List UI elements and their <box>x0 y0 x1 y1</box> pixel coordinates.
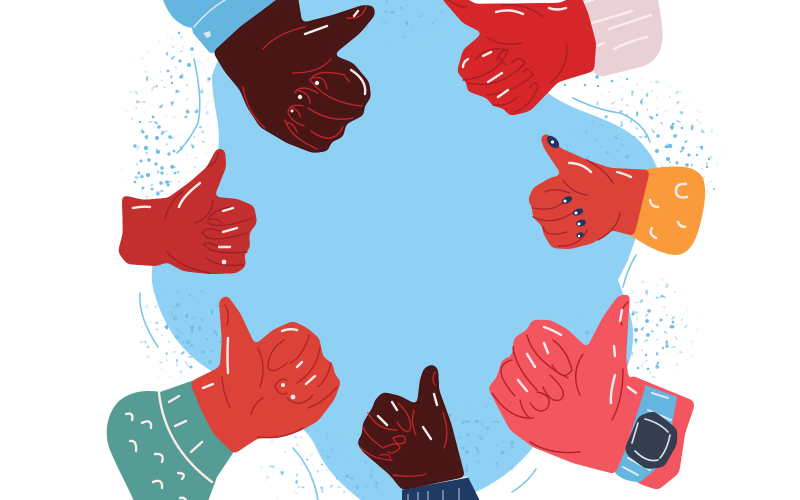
highlights <box>463 8 566 97</box>
fist <box>528 133 650 249</box>
navy nails <box>545 134 587 238</box>
fist <box>488 294 646 474</box>
fist <box>438 0 596 116</box>
stipple texture <box>120 0 722 500</box>
cuff: blue <box>160 0 300 53</box>
finger lines <box>449 0 567 112</box>
finger lines <box>243 6 366 149</box>
hand: red right with orange cuff <box>528 133 705 255</box>
highlights <box>203 329 315 399</box>
hand: dark bottom with navy cuff <box>357 364 482 500</box>
band: blue <box>615 385 677 482</box>
cuff: teal <box>107 378 233 500</box>
finger lines <box>360 372 447 476</box>
fist <box>357 364 465 490</box>
stipple: darker dots inside blob <box>173 293 490 454</box>
hand: red lower left with teal cuff <box>107 295 341 500</box>
highlights <box>569 163 631 177</box>
thin accent lines <box>140 59 650 500</box>
sleeve: coral <box>610 375 694 490</box>
highlights <box>290 11 365 112</box>
hand: dark top left with blue cuff <box>160 0 375 153</box>
cuff: navy <box>402 477 482 500</box>
finger lines <box>165 153 253 273</box>
finger lines <box>222 305 337 438</box>
cuff: pink <box>570 0 663 76</box>
hand: red top right with pink cuff <box>438 0 663 116</box>
highlights <box>378 394 437 439</box>
hand: coral lower right with blue band and watch <box>488 294 694 490</box>
cuff: orange <box>625 166 705 255</box>
hand: red left <box>118 148 257 274</box>
finger lines <box>492 302 628 453</box>
icon: wrist watch <box>625 411 677 469</box>
highlights <box>133 183 237 264</box>
fist <box>190 295 341 454</box>
illustration: circle of thumbs-up hands <box>106 0 722 500</box>
background blob <box>152 0 660 500</box>
highlights <box>518 310 636 403</box>
fist <box>118 148 257 274</box>
finger lines <box>533 160 620 246</box>
fist <box>213 0 375 153</box>
stipple: large dots on white <box>133 32 715 370</box>
